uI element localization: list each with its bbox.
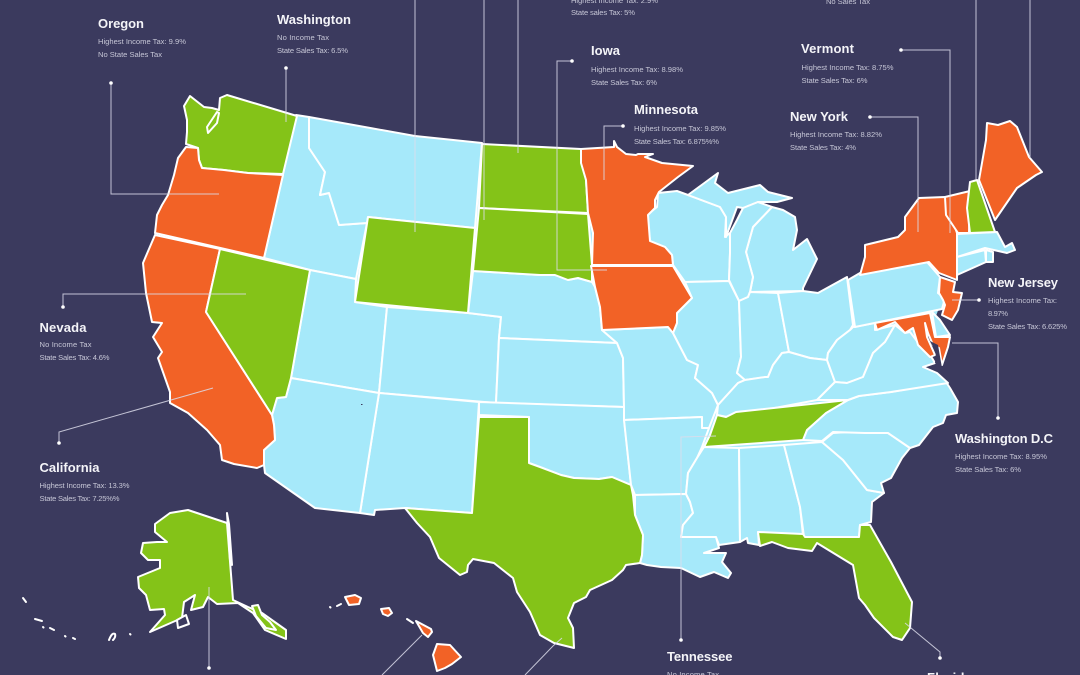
label: Oregon: No State Sales Tax bbox=[98, 50, 162, 59]
state: Oklahoma bbox=[479, 402, 631, 485]
state: Ohio bbox=[778, 277, 853, 360]
state: Delaware bbox=[932, 312, 950, 337]
state: Utah bbox=[291, 270, 387, 393]
state: Michigan upper peninsula bbox=[688, 173, 792, 237]
state: Florida bbox=[758, 525, 912, 640]
label: New Jersey: State Sales Tax: 6.625% bbox=[988, 322, 1067, 331]
leader: Hawaii bbox=[382, 635, 422, 675]
state: New Mexico bbox=[360, 393, 479, 515]
label: Iowa: Iowa bbox=[591, 43, 621, 58]
label: Vermont bbox=[801, 41, 894, 85]
label: Washington D.C: Highest Income Tax: 8.95% bbox=[955, 452, 1047, 461]
state: Tennessee bbox=[704, 400, 848, 447]
Aleutian Islands and small Hawaiian islands bbox=[23, 598, 413, 640]
state: Indiana bbox=[737, 292, 789, 380]
label: California: Highest Income Tax: 13.3% bbox=[40, 481, 130, 490]
leader: Nevada bbox=[61, 294, 246, 309]
label: Oregon bbox=[98, 16, 186, 59]
state: Georgia bbox=[784, 442, 884, 537]
leader: Texas bbox=[525, 638, 562, 675]
leader: Maine bbox=[1029, 0, 1031, 158]
label: Iowa bbox=[591, 43, 683, 87]
state: Mississippi bbox=[681, 447, 740, 545]
label: California: State Sales Tax: 7.25%% bbox=[40, 494, 120, 503]
state: South Carolina bbox=[822, 431, 910, 493]
state: California bbox=[143, 235, 275, 468]
label: Nevada: Nevada bbox=[40, 320, 87, 335]
leader: New Hampshire bbox=[975, 0, 977, 180]
state: Alabama bbox=[739, 445, 803, 545]
state: Kansas bbox=[496, 338, 624, 407]
state: Nevada bbox=[206, 249, 310, 415]
label: Washington D.C bbox=[955, 431, 1054, 474]
state: Colorado bbox=[379, 307, 501, 403]
leader: South Dakota bbox=[483, 0, 485, 220]
state: Arkansas bbox=[624, 417, 709, 495]
label: Iowa: State Sales Tax: 6% bbox=[591, 78, 657, 87]
label: Nevada bbox=[40, 320, 110, 362]
speck in New Mexico bbox=[361, 404, 362, 405]
state: Iowa bbox=[591, 266, 692, 333]
state: Kentucky bbox=[717, 352, 835, 417]
state: Nebraska bbox=[468, 271, 617, 343]
leader: Florida bbox=[905, 623, 942, 660]
label: Minnesota: State Sales Tax: 6.875%% bbox=[634, 137, 719, 146]
label: New Jersey: 8.97% bbox=[988, 309, 1008, 318]
label: California: California bbox=[40, 460, 100, 475]
state: Vermont bbox=[945, 191, 970, 233]
leader: North Dakota bbox=[517, 0, 519, 153]
label: Washington bbox=[277, 12, 351, 55]
label: Tennessee: Tennessee bbox=[667, 649, 732, 664]
leader: California bbox=[57, 388, 213, 445]
state: North Carolina bbox=[803, 382, 958, 448]
Alaska border tip bbox=[227, 513, 232, 565]
state: Alaska bbox=[138, 510, 286, 639]
label: Minnesota: Highest Income Tax: 9.85% bbox=[634, 124, 726, 133]
Hawaii: Kauai bbox=[345, 595, 361, 605]
map of the United States bbox=[138, 95, 1042, 671]
state: Connecticut bbox=[957, 250, 986, 275]
leader: Minnesota bbox=[604, 124, 625, 180]
state: New Hampshire bbox=[967, 180, 995, 233]
states: Massachusetts bbox=[957, 232, 1015, 257]
leader: Iowa bbox=[557, 59, 607, 270]
state: Rhode Island bbox=[986, 250, 993, 262]
state: Oregon bbox=[155, 147, 283, 258]
label: New Jersey: Highest Income Tax: bbox=[988, 296, 1057, 305]
state: Louisiana bbox=[635, 494, 731, 578]
state: New York bbox=[860, 197, 957, 280]
label: North Dakota (cropped): State sales Tax: 5% bbox=[571, 8, 635, 17]
state: Maine bbox=[979, 121, 1042, 220]
state: Wyoming bbox=[355, 217, 475, 313]
lake: Michigan bbox=[729, 202, 772, 301]
label: Washington: Washington bbox=[277, 12, 351, 27]
label: Minnesota bbox=[634, 102, 726, 146]
Hawaii: Oahu bbox=[381, 608, 392, 616]
leader: Washington D.C. bbox=[952, 343, 1000, 420]
leader: Vermont bbox=[899, 48, 950, 233]
state: Arizona bbox=[264, 378, 379, 513]
label: Washington: No Income Tax bbox=[277, 33, 329, 42]
label: Tennessee bbox=[667, 649, 732, 675]
Kodiak Island bbox=[177, 615, 189, 628]
label: Oregon: Highest Income Tax: 9.9% bbox=[98, 37, 186, 46]
label: Vermont: Highest Income Tax: 8.75% bbox=[802, 63, 894, 72]
label: Nevada: State Sales Tax: 4.6% bbox=[40, 353, 110, 362]
label: Oregon: Oregon bbox=[98, 16, 144, 31]
label: Vermont: State Sales Tax: 6% bbox=[802, 76, 868, 85]
label: California bbox=[40, 460, 130, 503]
label: Iowa: Highest Income Tax: 8.98% bbox=[591, 65, 683, 74]
state: West Virginia bbox=[827, 323, 895, 383]
label: New Jersey bbox=[988, 275, 1067, 331]
label: Vermont: Vermont bbox=[801, 41, 855, 56]
state: Missouri bbox=[602, 327, 718, 428]
Alaska panhandle islands bbox=[252, 605, 276, 630]
state: New Jersey bbox=[939, 277, 962, 320]
Chesapeake Bay bbox=[930, 341, 942, 368]
Puget Sound bbox=[207, 112, 219, 133]
leader: New Jersey bbox=[952, 298, 981, 302]
state: Montana bbox=[309, 117, 482, 228]
state: Washington bbox=[184, 95, 297, 174]
state: Illinois bbox=[673, 281, 745, 405]
label: New York: New York bbox=[790, 109, 849, 124]
state: South Dakota bbox=[473, 208, 592, 282]
label: New York: State Sales Tax: 4% bbox=[790, 143, 856, 152]
state: Minnesota bbox=[581, 141, 693, 265]
state: North Dakota bbox=[479, 144, 588, 213]
Hawaii: Maui bbox=[416, 621, 432, 637]
leader: Wyoming bbox=[414, 0, 416, 232]
label: Nevada: No Income Tax bbox=[40, 340, 92, 349]
state: Pennsylvania bbox=[848, 262, 945, 327]
state: Virginia bbox=[817, 325, 948, 400]
label: Washington D.C: Washington D.C bbox=[955, 431, 1054, 446]
leader: Tennessee bbox=[679, 436, 716, 642]
state: Texas bbox=[405, 417, 643, 648]
northeast base fill bbox=[957, 233, 995, 275]
leader: Oregon bbox=[109, 81, 219, 194]
state: Idaho bbox=[264, 115, 367, 279]
label: Washington D.C: State Sales Tax: 6% bbox=[955, 465, 1021, 474]
label: New Jersey: New Jersey bbox=[988, 275, 1059, 290]
Hawaii: Big Island bbox=[433, 644, 461, 671]
label: New York bbox=[790, 109, 882, 152]
label: New York: Highest Income Tax: 8.82% bbox=[790, 130, 882, 139]
leader: Washington bbox=[284, 66, 288, 122]
leader: New York bbox=[868, 115, 918, 232]
state: Michigan lower peninsula bbox=[746, 207, 817, 292]
state: Maryland and Washington D.C. bbox=[875, 313, 950, 365]
label: North Dakota (cropped) bbox=[571, 0, 658, 17]
leader: Alaska bbox=[207, 587, 211, 670]
state: Wisconsin bbox=[647, 191, 730, 282]
map base fill bbox=[210, 120, 942, 555]
label: Minnesota: Minnesota bbox=[634, 102, 699, 117]
label: Washington: State Sales Tax: 6.5% bbox=[277, 46, 348, 55]
